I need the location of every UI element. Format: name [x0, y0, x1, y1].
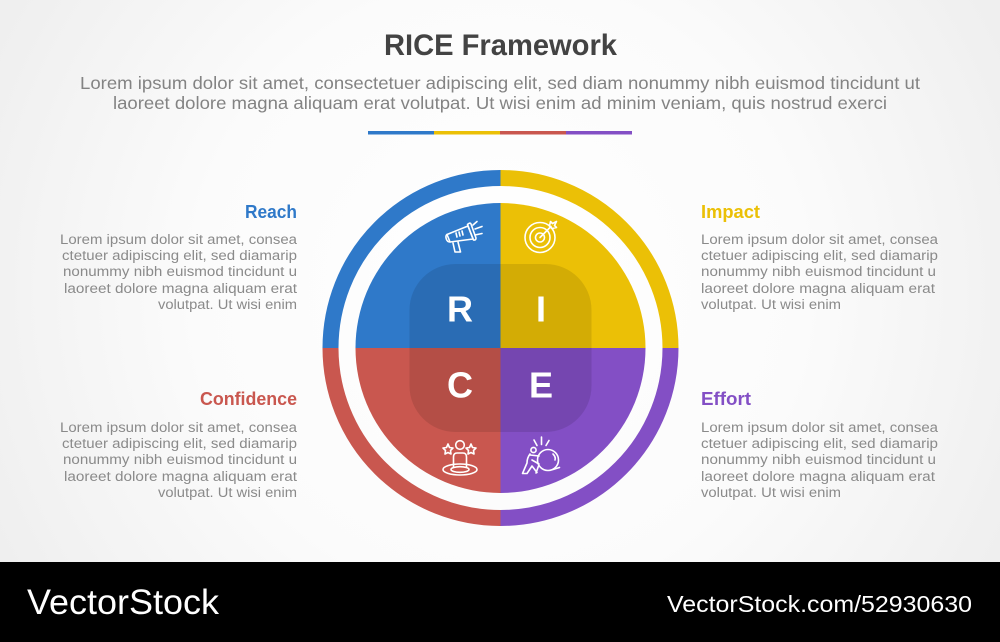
panel: effort text: nonummy nibh euismod tincidunt u: [701, 452, 936, 467]
icon: person pushing boulder: [522, 437, 560, 474]
panel: effort text: volutpat. Ut wisi enim: [701, 485, 841, 500]
letter R: R: [447, 288, 473, 330]
panel: confidence text: Lorem ipsum dolor sit amet, consea: [60, 420, 298, 435]
subtitle text: laoreet dolore magna aliquam erat volutpat. Ut wisi enim ad minim veniam, quis nostrud exerci: [113, 93, 887, 113]
panel: impact text: Lorem ipsum dolor sit amet, consea: [701, 232, 939, 247]
panel: confidence text: ctetuer adipiscing elit, sed diamarip: [62, 436, 297, 451]
panel: confidence text: nonummy nibh euismod tincidunt u: [63, 452, 297, 467]
panel: effort text: [701, 389, 939, 500]
central rounded square: [410, 264, 592, 432]
icon: target: [525, 222, 556, 252]
panel: effort text: ctetuer adipiscing elit, sed diamarip: [701, 436, 938, 451]
panel: effort text: Lorem ipsum dolor sit amet, consea: [701, 420, 939, 435]
letter C: C: [447, 364, 473, 406]
panel: reach text: [60, 202, 298, 312]
chart: RICE circle: [330, 178, 670, 518]
panel: reach text: nonummy nibh euismod tincidunt u: [63, 264, 297, 279]
panel: reach text: Lorem ipsum dolor sit amet, consea: [60, 232, 298, 247]
subtitle text: [80, 73, 920, 113]
title divider bar: [368, 131, 632, 134]
footer bar: [0, 562, 1000, 642]
panel: impact text: volutpat. Ut wisi enim: [701, 297, 841, 312]
footer logo: VectorStock: [27, 583, 220, 622]
icon: person with stars: [443, 441, 477, 475]
title: RICE Framework: [384, 29, 617, 62]
icon: megaphone: [446, 222, 482, 252]
panel: effort text: Effort: [701, 389, 751, 409]
panel: confidence text: volutpat. Ut wisi enim: [158, 485, 297, 500]
panel: impact text: ctetuer adipiscing elit, sed diamarip: [701, 248, 938, 263]
footer url: VectorStock.com/52930630: [667, 591, 972, 617]
panel: impact text: nonummy nibh euismod tincidunt u: [701, 264, 936, 279]
panel: impact text: laoreet dolore magna aliquam erat: [701, 281, 935, 296]
panel: impact text: [701, 202, 939, 312]
panel: confidence text: laoreet dolore magna aliquam erat: [64, 469, 297, 484]
panel: impact text: Impact: [701, 202, 760, 222]
panel: effort text: laoreet dolore magna aliquam erat: [701, 469, 935, 484]
outer ring segments: [330, 178, 670, 518]
subtitle text: Lorem ipsum dolor sit amet, consectetuer adipiscing elit, sed diam nonummy nibh euismod tincidunt ut: [80, 73, 920, 93]
panel: reach text: laoreet dolore magna aliquam erat: [64, 281, 297, 296]
panel: reach text: ctetuer adipiscing elit, sed diamarip: [62, 248, 297, 263]
panel: confidence text: [60, 389, 298, 500]
inner quadrants: [356, 203, 646, 493]
panel: reach text: volutpat. Ut wisi enim: [158, 297, 297, 312]
letter E: E: [529, 364, 553, 406]
panel: reach text: Reach: [245, 202, 297, 222]
letter I: I: [536, 288, 546, 330]
panel: confidence text: Confidence: [200, 389, 297, 409]
